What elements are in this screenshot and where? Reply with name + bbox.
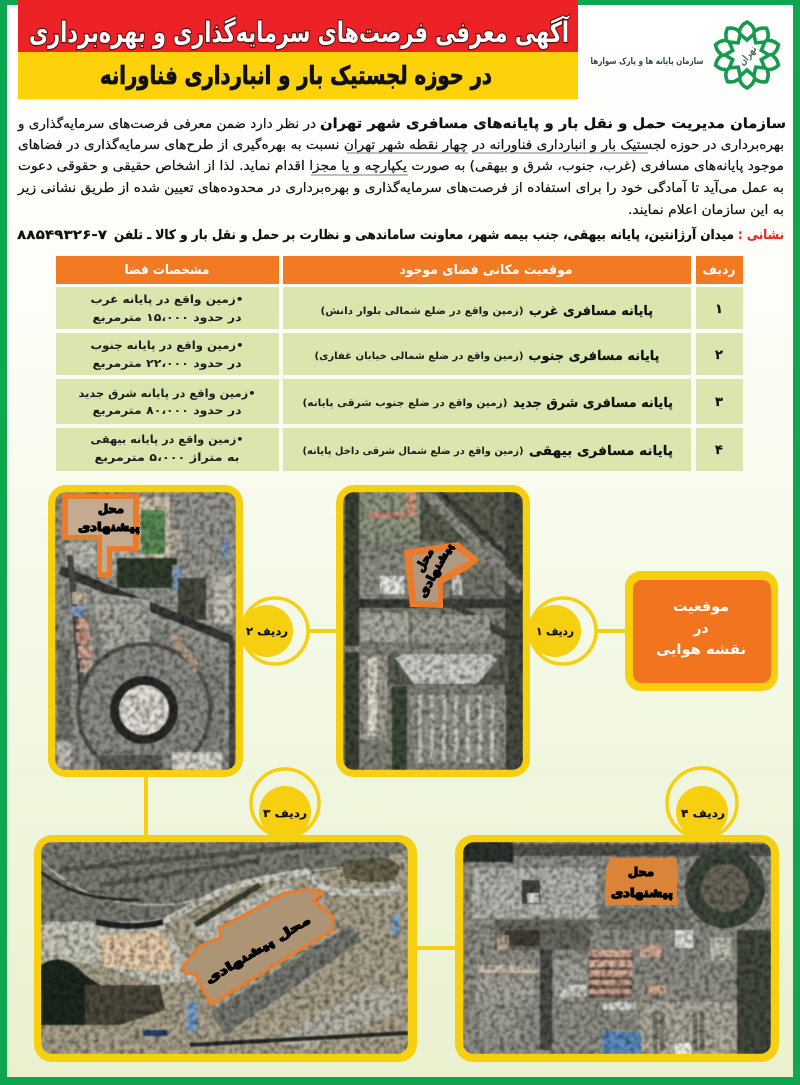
badge: row 4: ردیف ۴	[681, 807, 725, 820]
badge: row 4	[667, 768, 737, 838]
table row 1	[56, 287, 743, 329]
table row 2: پایانه مسافری جنوب	[528, 349, 660, 364]
map: row 2 south terminal: محل	[98, 502, 124, 516]
map: row 3 east terminal	[34, 835, 417, 1062]
intro line 4: به عمل می‌آید تا آمادگی خود را برای استفاده از فرصت‌های سرمایه‌گذاری و بهره‌برداری در محدوده‌های تعیین شده از طریق نشانی زیر	[17, 179, 784, 196]
title: red band	[18, 0, 578, 52]
subtitle: yellow band: در حوزه لجستیک بار و انبارداری فناورانه	[100, 61, 492, 91]
map: row 4 Beyhaghi terminal: پیشنهادی	[611, 886, 673, 900]
map: row 1 west terminal: پیشنهادی	[415, 540, 456, 600]
map: row 2 south terminal	[48, 485, 243, 777]
table row 3: ۳	[715, 395, 723, 410]
map: row 4 Beyhaghi terminal: محل	[628, 865, 654, 879]
badge: row 1	[529, 598, 596, 664]
intro text block	[17, 116, 786, 218]
table row 4: به متراژ ۵،۰۰۰ مترمربع	[94, 451, 240, 464]
badge: row 3	[251, 769, 319, 838]
icon: green rosette	[713, 22, 781, 88]
title banner	[18, 0, 578, 100]
callout: aerial map location	[625, 571, 778, 691]
table row 1: در حدود ۱۵،۰۰۰ مترمربع	[92, 311, 242, 324]
site marker	[62, 494, 139, 577]
table of terminals	[56, 256, 743, 471]
badge: row 1: ردیف ۱	[536, 625, 574, 638]
map: row 1 west terminal	[336, 485, 530, 777]
map: row 1 west terminal: محل	[412, 546, 437, 574]
logo: Tehran rosette and organisation name	[590, 22, 781, 88]
table row 4: •زمین واقع در پایانه بیهقی	[90, 433, 244, 446]
table row 1: •زمین واقع در پایانه غرب	[90, 293, 244, 306]
callout: aerial map location: در	[692, 621, 709, 637]
table row 3: پایانه مسافری شرق جدید	[513, 396, 673, 411]
table row 3: •زمین واقع در پایانه شرق جدید	[78, 387, 255, 400]
subtitle: yellow band	[18, 52, 578, 100]
table row 4: (زمین واقع در ضلع شمال شرقی داخل پایانه)	[302, 446, 524, 457]
table row 1: (زمین واقع در ضلع شمالی بلوار دانش)	[320, 306, 524, 317]
badge: row 2: ردیف ۲	[246, 625, 288, 638]
table header: مشخصات فضا	[124, 263, 210, 278]
table row 2: (زمین واقع در ضلع شمالی خیابان غفاری)	[314, 351, 524, 362]
table row 1: پایانه مسافری غرب	[529, 304, 653, 319]
badge: row 2	[241, 598, 308, 664]
table row 2: در حدود ۲۲،۰۰۰ مترمربع	[92, 357, 242, 370]
table row 3: (زمین واقع در ضلع جنوب شرقی پایانه)	[302, 398, 508, 409]
intro line 2: بهره‌برداری در حوزه لجستیک بار و انبارداری فناورانه در چهار نقطه شهر تهران نسبت به بهره‌گیری از طرح‌های سرمایه‌گذاری در فضاهای	[18, 137, 784, 153]
map: row 2 south terminal: پیشنهادی	[78, 520, 140, 534]
table header: موقعیت مکانی فضای موجود	[400, 263, 572, 278]
table row 2: ۲	[715, 348, 723, 363]
site marker	[605, 858, 677, 905]
intro line 3: موجود پایانه‌های مسافری (غرب، جنوب، شرق و بیهقی) به صورت یکپارچه و یا مجزا اقدام نماید. لذا از اشخاص حقیقی و حقوقی دعوت	[18, 159, 784, 174]
badge: row 3: ردیف ۳	[263, 807, 307, 820]
intro line 5: به این سازمان اعلام نمایند.	[628, 203, 784, 218]
table row 4: ۴	[715, 443, 723, 458]
table header: ردیف	[702, 263, 736, 278]
table row 4	[56, 428, 743, 471]
logo calligraphy: تهران	[737, 44, 760, 68]
map: row 3 east terminal: محل پیشنهادی	[203, 913, 313, 986]
address line	[17, 226, 784, 243]
map: row 4 Beyhaghi terminal	[455, 835, 779, 1062]
site marker	[404, 542, 480, 608]
organisation name: سازمان پایانه ها و پارک سوارها	[590, 57, 704, 67]
address text: میدان آرژانتین، پایانه بیهقی، جنب بیمه شهر، معاونت ساماندهی و نظارت بر حمل و نقل بار و کالا ـ تلفن	[114, 226, 734, 243]
connector lines	[146, 631, 626, 948]
intro bold lead: سازمان مدیریت حمل و نقل بار و پایانه‌های مسافری شهر تهران	[320, 116, 786, 132]
intro line 1 remainder: در نظر دارد ضمن معرفی فرصت‌های سرمایه‌گذاری و	[17, 116, 316, 132]
table row 4: پایانه مسافری بیهقی	[529, 444, 673, 459]
table row 1: ۱	[715, 302, 723, 317]
table row 2: •زمین واقع در پایانه جنوب	[90, 339, 244, 352]
site marker	[183, 890, 333, 1004]
table row 2	[56, 333, 743, 375]
phone number: ۸۸۵۴۹۳۲۶-۷	[17, 228, 107, 243]
address label: نشانی :	[738, 228, 784, 243]
title: red band: آگهی معرفی فرصت‌های سرمایه‌گذاری و بهره‌برداری	[29, 15, 570, 49]
table row 3: در حدود ۸۰،۰۰۰ مترمربع	[92, 404, 242, 417]
table header	[56, 256, 743, 284]
callout: aerial map location: نقشه هوایی	[656, 642, 746, 658]
callout: aerial map location: موقعیت	[673, 599, 729, 615]
table row 3	[56, 379, 743, 424]
